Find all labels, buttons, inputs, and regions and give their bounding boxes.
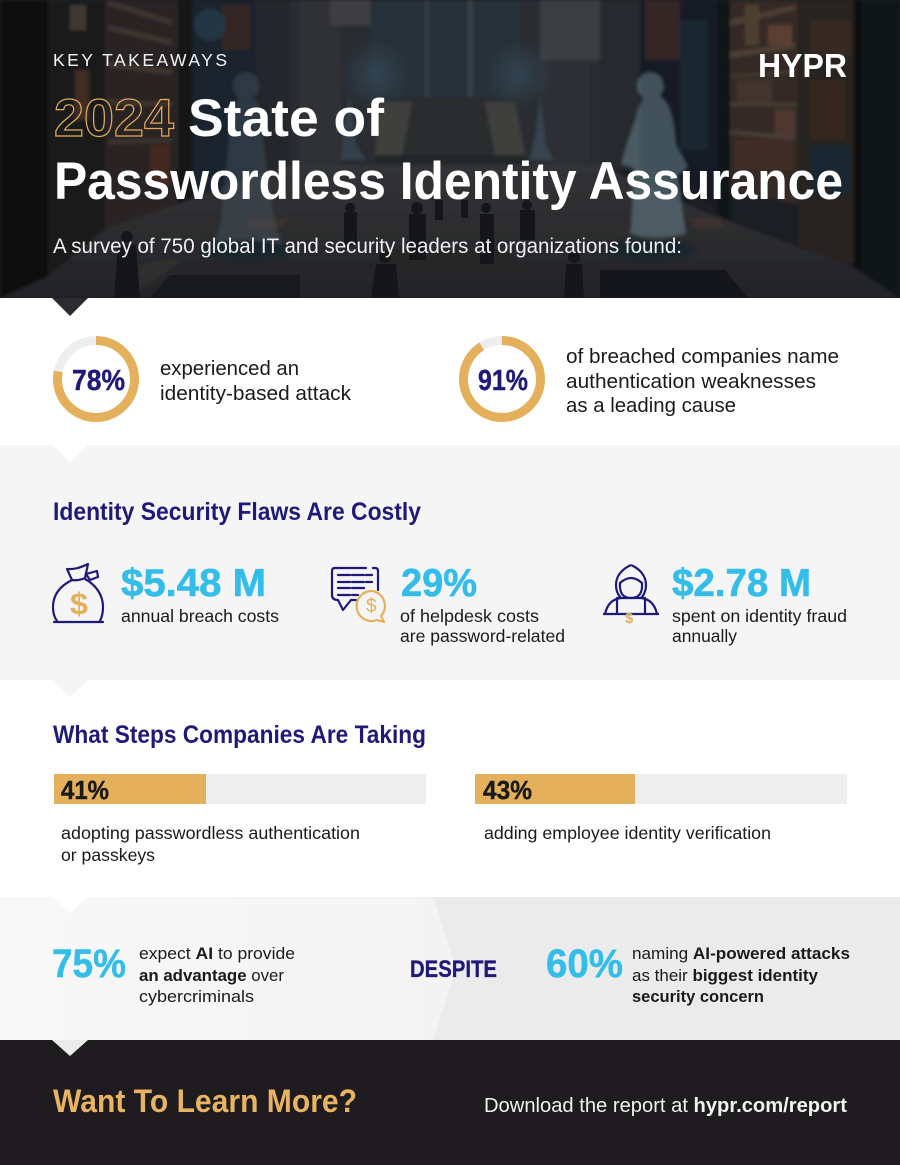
stat: helpdesk costs: of helpdesk costs	[400, 606, 539, 626]
header background illustration	[0, 0, 900, 298]
progress bar: 41%: 41%	[61, 775, 109, 805]
notch	[52, 680, 88, 697]
stat: helpdesk costs: 29%	[401, 562, 477, 605]
notch	[52, 897, 88, 913]
text: authentication weaknesses: as a leading cause	[566, 394, 736, 417]
subtitle: A survey of 750 global IT and security leaders at organizations found:	[53, 235, 682, 258]
text: employee verification: adding employee identity verification	[484, 823, 771, 843]
panel: AI comparison	[0, 897, 900, 1040]
notch	[52, 1040, 88, 1056]
progress bar: 43%: 43%	[483, 775, 532, 805]
donut chart: 78%: 78%	[72, 365, 125, 397]
eyebrow: key takeaways: KEY TAKEAWAYS	[53, 50, 227, 70]
text: AI advantage	[139, 944, 295, 1006]
progress bar: 43%	[475, 774, 847, 805]
donut chart: 91%: 91%	[478, 365, 528, 397]
silhouettes of people	[114, 200, 748, 298]
title line 1: 2024	[54, 89, 175, 148]
stat: identity fraud: spent on identity fraud	[672, 606, 847, 626]
stat: helpdesk costs	[400, 562, 565, 646]
donut chart: 91%	[464, 340, 540, 418]
icon: hooded hacker: $	[625, 610, 634, 627]
text: AI advantage: cybercriminals	[139, 987, 254, 1006]
stat: breach costs	[121, 562, 279, 626]
stat: identity fraud: $2.78 M	[672, 562, 811, 605]
title line 1: State of	[188, 89, 384, 148]
panel: steps companies are taking	[0, 680, 900, 897]
icon: money bag: $	[70, 586, 88, 621]
text: authentication weaknesses: of breached companies name	[566, 345, 839, 368]
text: authentication weaknesses: authentication weaknesses	[566, 370, 816, 393]
download link text: Download the report at hypr.com/report	[484, 1094, 847, 1117]
panel: attack statistics	[0, 298, 900, 445]
heading: What Steps Companies Are Taking	[53, 721, 426, 749]
label: despite: DESPITE	[410, 956, 497, 983]
stat: breach costs: $5.48 M	[121, 562, 266, 605]
progress bar: 41%	[54, 774, 426, 805]
text: identity-based attack: identity-based attack	[160, 382, 352, 405]
icon: helpdesk chat bubble	[332, 568, 385, 622]
heading: Identity Security Flaws Are Costly	[53, 498, 421, 526]
stat: identity fraud: annually	[672, 626, 737, 646]
donut chart: 78%	[58, 340, 134, 418]
icon: hooded hacker	[603, 565, 659, 627]
stat: 60%: 60%	[546, 942, 623, 986]
text: identity-based attack	[160, 357, 352, 405]
text: adopting passwordless	[61, 823, 360, 865]
text: adopting passwordless: or passkeys	[61, 845, 155, 865]
text: AI-powered attacks	[632, 944, 850, 1006]
stat: identity fraud	[672, 562, 847, 646]
panel: identity security flaws	[0, 445, 900, 680]
hall floor	[0, 165, 900, 298]
icon: money bag	[53, 564, 103, 622]
title line 1	[54, 89, 384, 148]
stat: 75%: 75%	[52, 942, 126, 986]
title line 2: Passwordless Identity Assurance	[54, 152, 843, 211]
header banner	[0, 0, 900, 298]
central hall	[290, 0, 600, 170]
right wall shelves	[855, 0, 900, 298]
text: authentication weaknesses	[566, 345, 839, 417]
text: adopting passwordless: adopting passwordless authentication	[61, 823, 360, 843]
text: AI-powered attacks: security concern	[632, 987, 764, 1006]
notch	[52, 445, 88, 462]
text: identity-based attack: experienced an	[160, 357, 299, 380]
stat: helpdesk costs: are password-related	[400, 626, 565, 646]
call to action heading: Want To Learn More?	[53, 1083, 357, 1119]
footer	[0, 1040, 900, 1165]
logo: HYPR: HYPR	[758, 47, 847, 84]
text: AI-powered attacks: naming AI-powered attacks	[632, 944, 850, 963]
stat: breach costs: annual breach costs	[121, 606, 279, 626]
notch	[52, 298, 88, 316]
text: AI advantage: an advantage over	[139, 966, 284, 985]
left wall shelves	[0, 0, 48, 298]
text: AI advantage: expect AI to provide	[139, 944, 295, 963]
text: AI-powered attacks: as their biggest identity	[632, 966, 819, 985]
hologram statues	[199, 72, 696, 260]
icon: helpdesk chat bubble: $	[366, 596, 377, 617]
